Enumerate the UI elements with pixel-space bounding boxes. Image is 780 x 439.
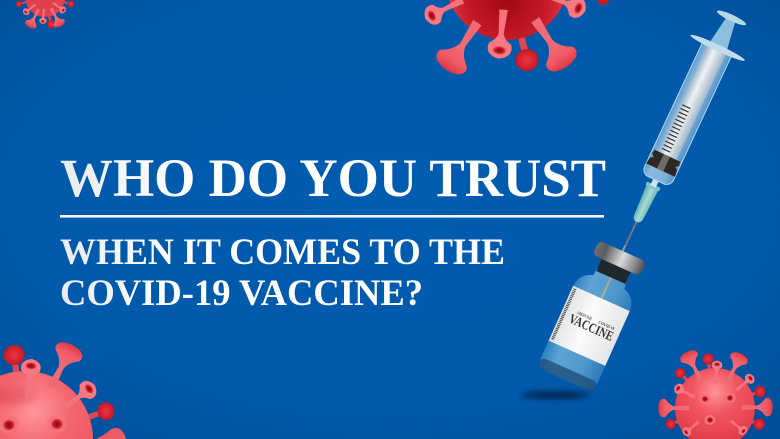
title divider xyxy=(60,215,604,218)
virus: top left xyxy=(15,0,75,30)
virus: top centre xyxy=(421,0,609,79)
vial label: GREEN VIAL xyxy=(577,310,593,321)
vial shadow xyxy=(521,391,589,399)
icon: syringe xyxy=(596,2,760,264)
icon: vaccine vial xyxy=(537,233,653,392)
vial label: COVID-19 xyxy=(598,320,615,331)
subtitle: WHEN IT COMES TO THE xyxy=(60,232,505,273)
virus: bottom right xyxy=(658,348,773,439)
subtitle: COVID-19 VACCINE? xyxy=(60,273,423,314)
vial label xyxy=(549,286,630,366)
title: WHO DO YOU TRUST xyxy=(60,148,606,208)
vial label: VACCINE xyxy=(567,311,616,344)
virus: bottom left xyxy=(0,338,126,439)
subtitle xyxy=(60,232,505,314)
